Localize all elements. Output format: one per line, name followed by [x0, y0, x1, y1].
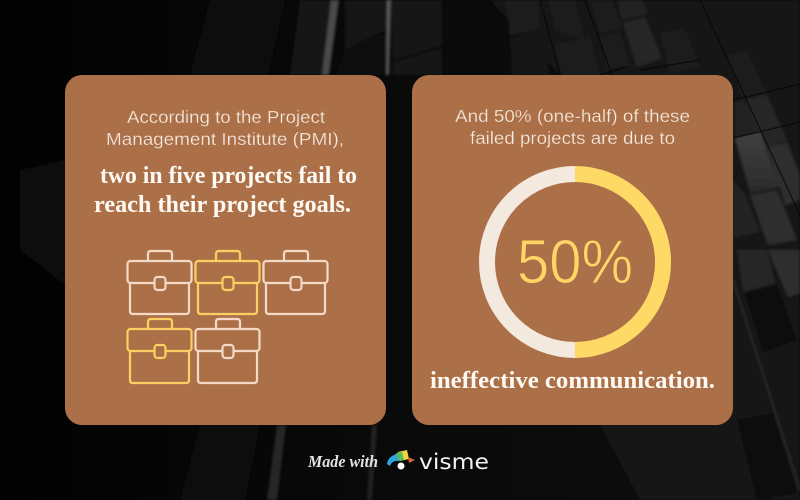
icon: briefcase 4 highlighted: [128, 319, 192, 383]
heading: ineffective communication: ineffective communication.: [430, 368, 715, 394]
icon: briefcase 5: [196, 319, 260, 383]
donut value label: 50%: [517, 228, 633, 297]
heading: two in five projects fail: two in five projects fail to: [100, 163, 357, 189]
heading: two in five projects fail: reach their project goals.: [94, 192, 351, 218]
icon grid: five briefcases, two highlighted: [128, 251, 328, 383]
icon: briefcase 3: [264, 251, 328, 314]
icon: visme logo: [387, 450, 415, 470]
donut chart: 50 percent: [487, 174, 663, 350]
made with label: Made with: [307, 452, 378, 471]
panel: right statistic card: [412, 75, 733, 425]
intro text: share of failed projects: failed projects are due to: [470, 128, 675, 148]
icon: briefcase 1: [128, 251, 192, 314]
intro text: PMI source: According to the Project: [127, 107, 325, 127]
footer: Made with Visme credit: [307, 450, 489, 474]
heading: two in five projects fail: [94, 163, 357, 218]
panel: left statistic card: [65, 75, 386, 425]
intro text: PMI source: Management Institute (PMI),: [106, 129, 344, 149]
icon: briefcase 2 highlighted: [196, 251, 260, 314]
visme wordmark: visme: [419, 450, 489, 474]
intro text: PMI source: [106, 107, 344, 149]
intro text: share of failed projects: And 50% (one-half) of these: [455, 106, 690, 126]
intro text: share of failed projects: [455, 106, 690, 148]
